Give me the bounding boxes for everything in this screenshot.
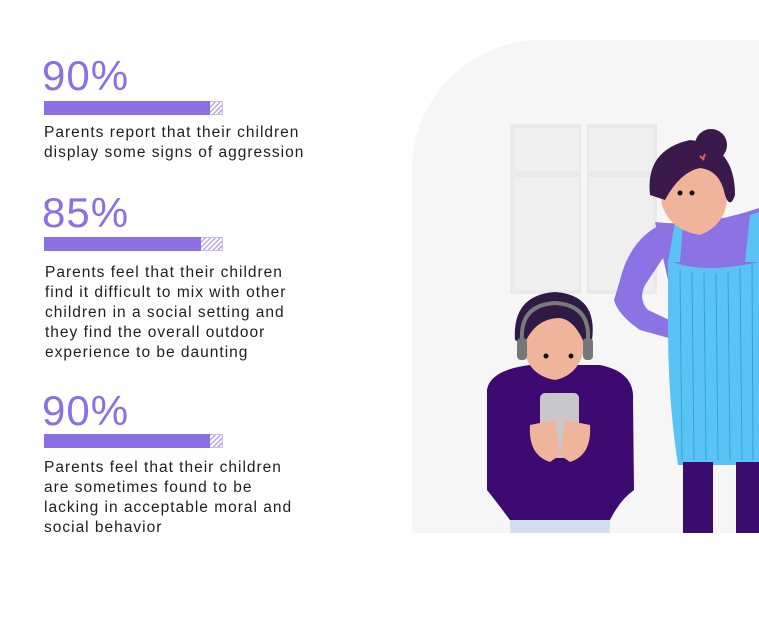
percent 1: 90%: [42, 52, 129, 99]
stat 2: [42, 189, 286, 361]
text 2: children in a social setting and: [45, 304, 285, 321]
text 2: experience to be daunting: [45, 344, 248, 361]
mother: [614, 129, 759, 533]
stat 3: [42, 387, 292, 536]
bar 3: [44, 434, 223, 448]
percent 3: 90%: [42, 387, 129, 434]
text 3: [44, 459, 292, 536]
text 3: are sometimes found to be: [44, 479, 253, 496]
text 2: [45, 264, 286, 361]
window: [510, 124, 657, 294]
text 1: display some signs of aggression: [44, 144, 304, 161]
child: [487, 292, 634, 533]
bar 2: [44, 237, 223, 251]
percent 2: 85%: [42, 189, 129, 236]
text 3: social behavior: [44, 519, 162, 536]
text 2: they find the overall outdoor: [45, 324, 265, 341]
stat 1: [42, 52, 304, 161]
text 3: lacking in acceptable moral and: [44, 499, 292, 516]
text 2: Parents feel that their children: [45, 264, 283, 281]
text 1: Parents report that their children: [44, 124, 299, 141]
text 1: [44, 124, 304, 161]
background panel: [412, 40, 759, 533]
text 3: Parents feel that their children: [44, 459, 282, 476]
text 2: find it difficult to mix with other: [45, 284, 286, 301]
bar 1: [44, 101, 223, 115]
